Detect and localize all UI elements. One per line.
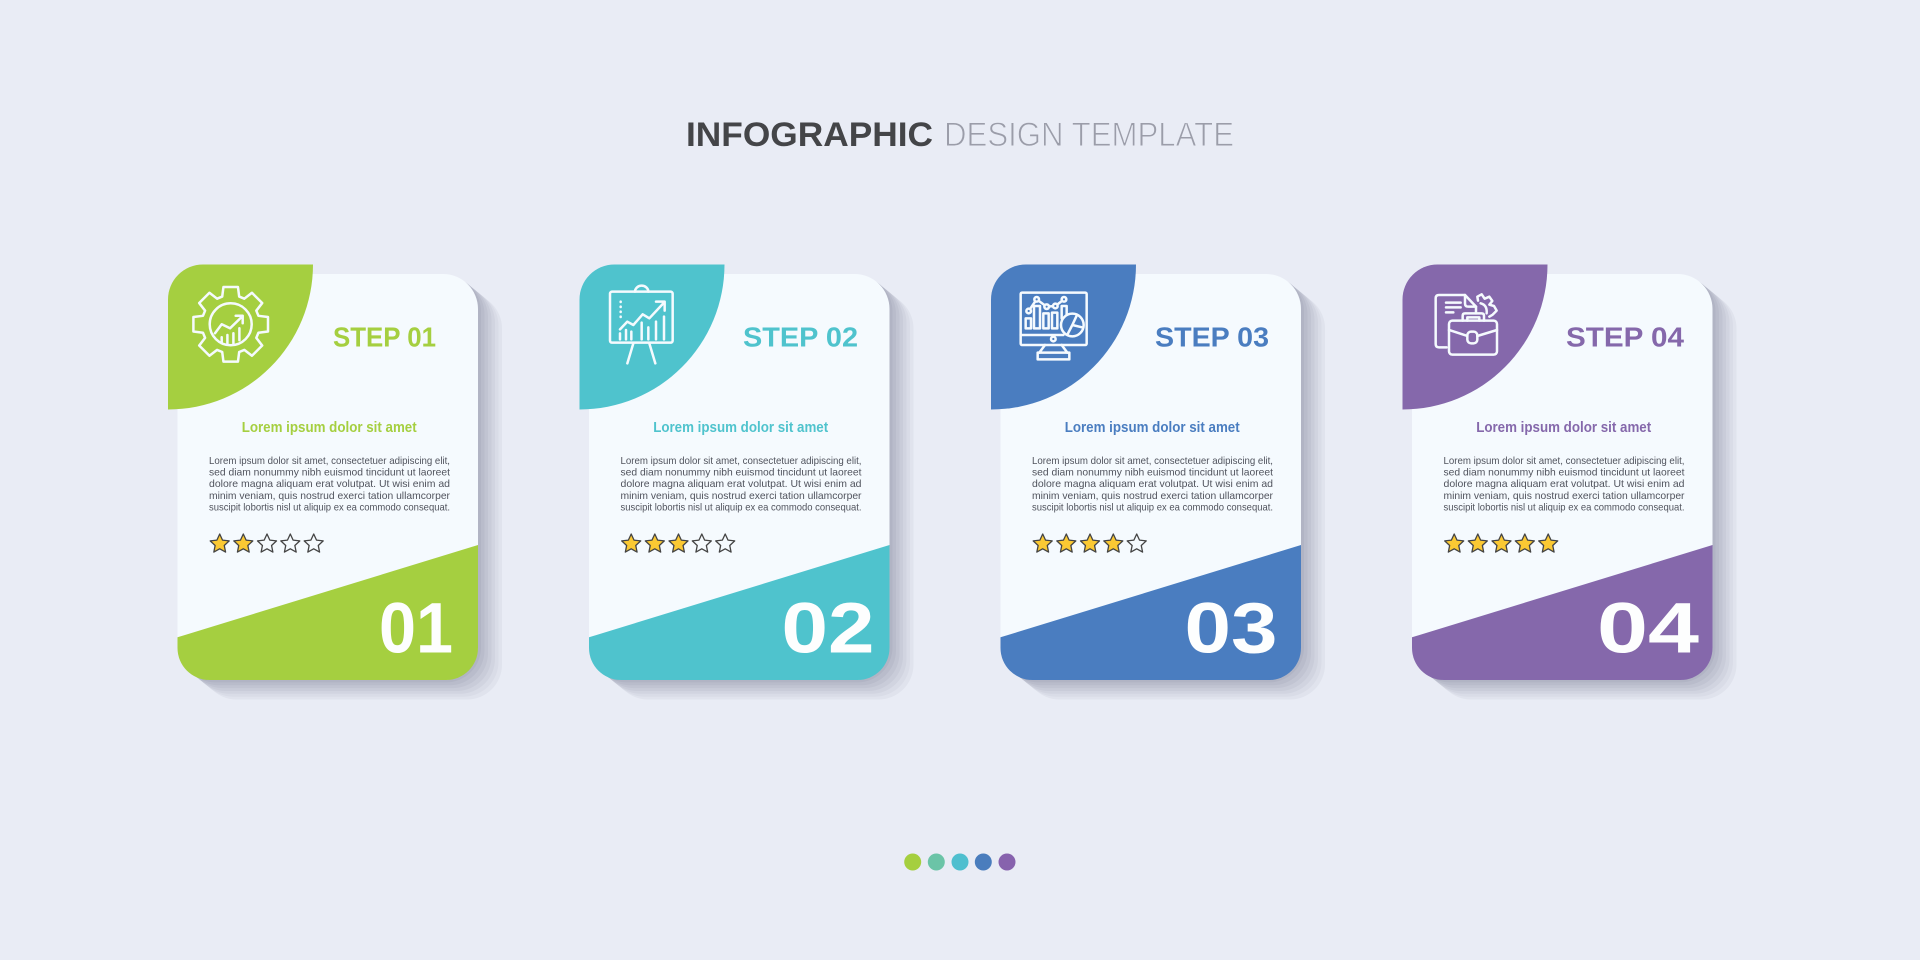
panel: step 02 <box>580 264 914 700</box>
bottom wedge <box>178 545 478 680</box>
star rating: 2 of 5 <box>210 534 323 552</box>
bottom wedge <box>1412 545 1712 680</box>
description: minim veniam, quis nostrud exerci tation ullamcorper <box>1032 491 1274 502</box>
description: Lorem ipsum dolor sit amet, consectetuer adipiscing elit, <box>1032 456 1273 467</box>
description: sed diam nonummy nibh euismod tincidunt ut laoreet <box>620 468 862 479</box>
description <box>1032 456 1274 513</box>
subtitle: Lorem ipsum dolor sit amet <box>1065 420 1240 436</box>
card shadow <box>1004 276 1325 700</box>
description: Lorem ipsum dolor sit amet, consectetuer adipiscing elit, <box>209 456 450 467</box>
card shadow <box>1415 276 1736 700</box>
card body <box>178 274 478 680</box>
panel: step 03 <box>991 264 1325 700</box>
description <box>209 456 451 513</box>
corner tab <box>991 264 1136 410</box>
step label: STEP 03 <box>1155 322 1269 352</box>
corner tab <box>1402 264 1548 410</box>
description: suscipit lobortis nisl ut aliquip ex ea commodo consequat. <box>209 502 450 513</box>
description: sed diam nonummy nibh euismod tincidunt ut laoreet <box>1444 468 1685 479</box>
subtitle: Lorem ipsum dolor sit amet <box>653 420 828 436</box>
step number: 01 <box>379 590 453 668</box>
description: suscipit lobortis nisl ut aliquip ex ea commodo consequat. <box>1032 502 1273 513</box>
title: DESIGN TEMPLATE <box>944 116 1234 154</box>
star rating: 5 of 5 <box>1445 534 1558 552</box>
panel: step 01 <box>168 264 502 700</box>
description: minim veniam, quis nostrud exerci tation ullamcorper <box>620 491 862 502</box>
subtitle: Lorem ipsum dolor sit amet <box>242 420 417 436</box>
description: minim veniam, quis nostrud exerci tation ullamcorper <box>209 491 451 502</box>
description: Lorem ipsum dolor sit amet, consectetuer adipiscing elit, <box>1444 456 1684 467</box>
step number: 04 <box>1597 590 1700 668</box>
title <box>686 116 1234 154</box>
description <box>1444 456 1685 513</box>
star rating: 4 of 5 <box>1033 534 1146 552</box>
corner tab <box>168 264 313 410</box>
description: sed diam nonummy nibh euismod tincidunt ut laoreet <box>1032 468 1273 479</box>
bottom wedge <box>589 545 890 680</box>
star rating: 3 of 5 <box>622 534 735 552</box>
card body <box>1000 274 1301 680</box>
card shadow <box>180 276 502 700</box>
description: sed diam nonummy nibh euismod tincidunt ut laoreet <box>209 468 450 479</box>
description <box>620 456 862 513</box>
pagination dots <box>904 854 1016 870</box>
step number: 02 <box>782 590 874 668</box>
description: Lorem ipsum dolor sit amet, consectetuer adipiscing elit, <box>620 456 862 467</box>
card body <box>1412 274 1712 680</box>
panel: step 04 <box>1402 264 1736 700</box>
corner tab <box>580 264 724 410</box>
title: INFOGRAPHIC <box>686 116 933 154</box>
card body <box>589 274 890 680</box>
icon: monitor with charts <box>1021 293 1087 359</box>
description: suscipit lobortis nisl ut aliquip ex ea commodo consequat. <box>1444 502 1684 513</box>
icon: gear with growth chart <box>193 287 268 362</box>
card shadow <box>592 276 914 700</box>
description: suscipit lobortis nisl ut aliquip ex ea commodo consequat. <box>620 502 862 513</box>
description: dolore magna aliquam erat volutpat. Ut wisi enim ad <box>620 479 862 490</box>
bottom wedge <box>1000 545 1301 680</box>
subtitle: Lorem ipsum dolor sit amet <box>1476 420 1651 436</box>
step label: STEP 01 <box>333 322 436 352</box>
step number: 03 <box>1184 590 1278 668</box>
icon: document, gear and briefcase <box>1436 294 1497 355</box>
description: dolore magna aliquam erat volutpat. Ut wisi enim ad <box>1032 479 1273 490</box>
step label: STEP 02 <box>743 322 858 352</box>
description: dolore magna aliquam erat volutpat. Ut wisi enim ad <box>1444 479 1685 490</box>
description: dolore magna aliquam erat volutpat. Ut wisi enim ad <box>209 479 450 490</box>
step label: STEP 04 <box>1566 322 1685 352</box>
icon: presentation board <box>610 286 673 363</box>
description: minim veniam, quis nostrud exerci tation ullamcorper <box>1444 491 1685 502</box>
